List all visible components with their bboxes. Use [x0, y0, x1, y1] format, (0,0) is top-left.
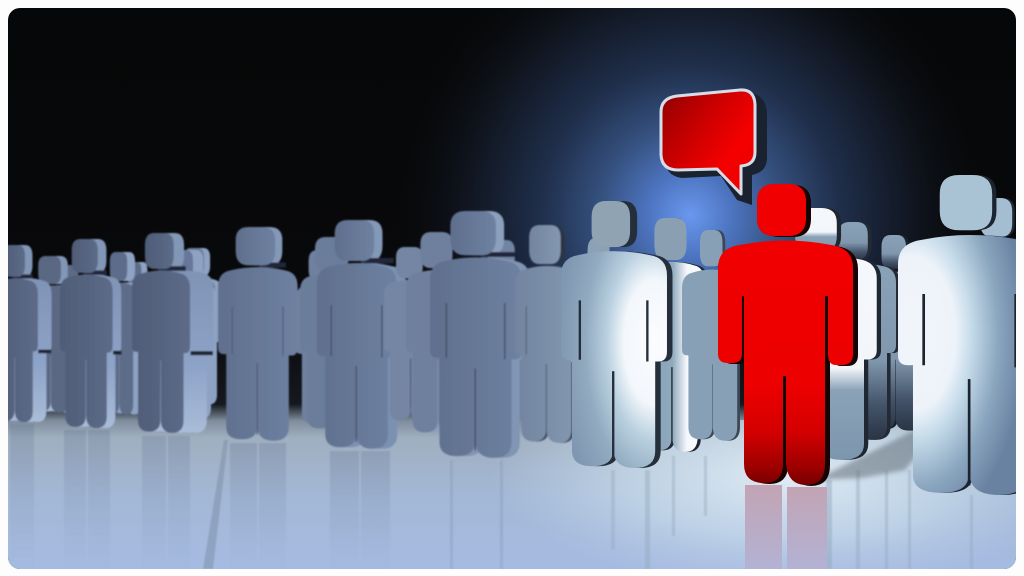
far right middle figure	[838, 222, 898, 440]
figure behind front figure	[520, 224, 572, 444]
small head behind front figure	[570, 238, 610, 362]
red figure reflection	[745, 485, 827, 569]
reflective floor	[8, 354, 1016, 569]
bubble depth	[666, 93, 767, 205]
ghost figures centre-left	[296, 236, 350, 429]
heads behind right figure	[980, 198, 1015, 237]
front right figure	[898, 175, 1024, 495]
back figures left	[28, 248, 222, 419]
figure 5	[317, 220, 406, 449]
figure 1	[8, 244, 52, 422]
crowd: left cluster	[0, 211, 581, 458]
figure 2	[60, 239, 122, 428]
figure 3	[132, 233, 213, 433]
bubble face	[661, 90, 755, 194]
blue spotlight glow	[436, 8, 944, 272]
back figure with lit side	[654, 218, 705, 452]
figure 4	[218, 227, 298, 441]
grey figure behind red	[682, 230, 740, 441]
lit white figure behind red	[795, 208, 881, 460]
crowd: behind-right figures	[561, 175, 1024, 495]
figure 7 front	[561, 201, 672, 468]
red figure	[718, 184, 858, 486]
figures behind figure 6	[384, 232, 530, 434]
floor reflections	[10, 424, 973, 569]
figure 6	[430, 211, 530, 458]
far right dark figure	[882, 235, 913, 431]
speech bubble	[661, 90, 767, 205]
floor shadow behind red figure	[824, 430, 913, 482]
floor light pool	[540, 420, 1016, 566]
